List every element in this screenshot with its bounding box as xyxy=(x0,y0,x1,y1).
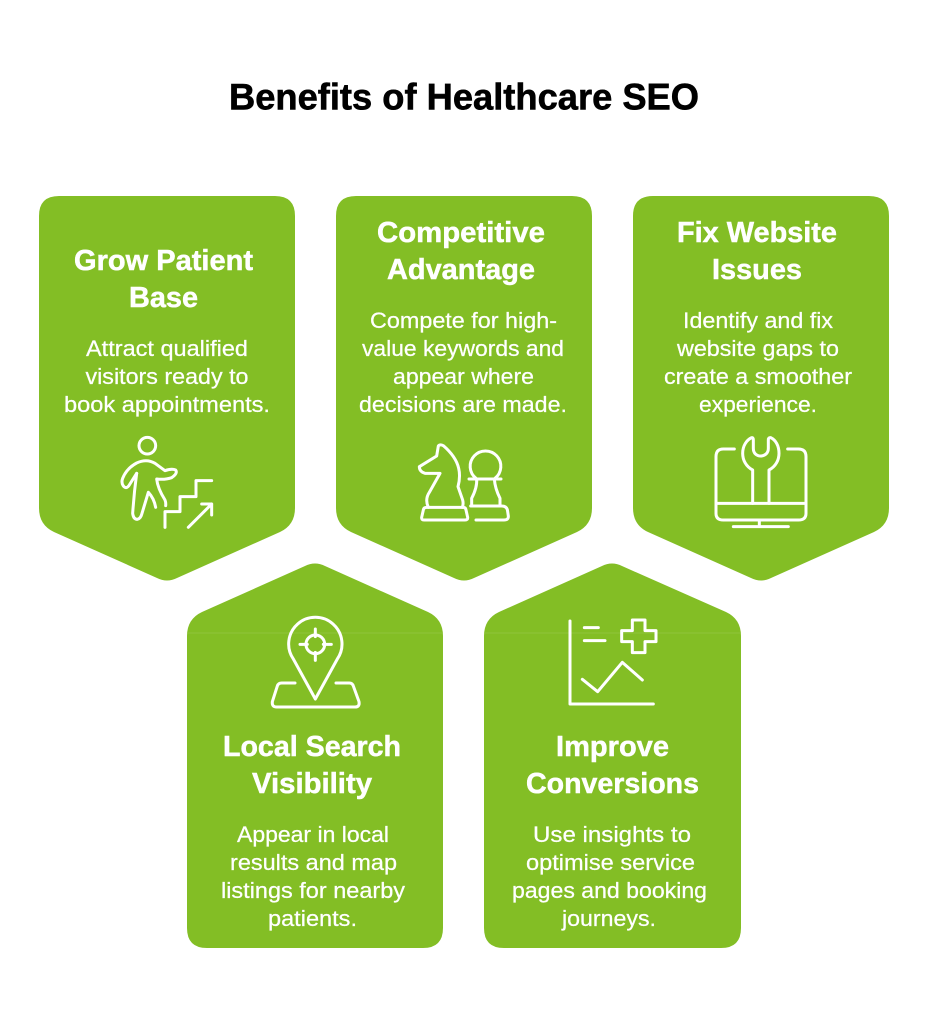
body text: Appear in local xyxy=(237,822,389,847)
heading xyxy=(526,731,699,800)
card shape xyxy=(484,564,741,948)
heading: Issues xyxy=(712,254,802,286)
heading xyxy=(677,217,837,286)
heading: Improve xyxy=(556,731,669,763)
heading: Conversions xyxy=(526,768,699,800)
heading xyxy=(74,245,253,314)
body text: book appointments. xyxy=(64,392,270,417)
panel: competitive advantage xyxy=(336,196,592,580)
heading xyxy=(377,217,545,286)
body text: Compete for high- xyxy=(370,308,557,333)
body text xyxy=(221,822,405,931)
body text: Attract qualified xyxy=(86,336,248,361)
icon: growth chart with medical cross xyxy=(570,620,656,704)
body text: results and map xyxy=(230,850,397,875)
body text: Identify and fix xyxy=(683,308,833,333)
body text: value keywords and xyxy=(362,336,564,361)
body text: pages and booking xyxy=(512,878,707,903)
body text: appear where xyxy=(393,364,534,389)
card shape xyxy=(633,196,889,580)
panel: fix website issues xyxy=(633,196,889,580)
title: Benefits of Healthcare SEO xyxy=(229,76,699,118)
body text xyxy=(512,822,707,931)
card shape xyxy=(336,196,592,580)
body text: decisions are made. xyxy=(359,392,567,417)
panel: local search visibility xyxy=(187,564,443,948)
body text: create a smoother xyxy=(664,364,852,389)
icon: monitor with wrench xyxy=(716,438,806,527)
body text xyxy=(359,308,567,417)
heading xyxy=(223,731,401,800)
heading: Base xyxy=(129,282,198,314)
body text xyxy=(664,308,852,417)
body text xyxy=(64,336,270,417)
body text: Use insights to xyxy=(533,822,691,847)
card shape xyxy=(39,196,295,580)
card shape xyxy=(187,564,443,948)
body text: website gaps to xyxy=(676,336,839,361)
heading: Advantage xyxy=(387,254,535,286)
icon: map pin with target xyxy=(272,617,359,707)
body text: patients. xyxy=(268,906,357,931)
body text: journeys. xyxy=(561,906,656,931)
body text: listings for nearby xyxy=(221,878,405,903)
heading: Fix Website xyxy=(677,217,837,249)
panel: improve conversions xyxy=(484,564,741,948)
icon: person climbing stairs xyxy=(122,437,212,527)
icon: chess knight and pawn xyxy=(419,445,508,520)
body text: visitors ready to xyxy=(86,364,248,389)
heading: Grow Patient xyxy=(74,245,253,277)
panel: grow patient base xyxy=(39,196,295,580)
heading: Local Search xyxy=(223,731,401,763)
body text: optimise service xyxy=(526,850,695,875)
body text: experience. xyxy=(699,392,817,417)
heading: Competitive xyxy=(377,217,545,249)
heading: Visibility xyxy=(252,768,372,800)
